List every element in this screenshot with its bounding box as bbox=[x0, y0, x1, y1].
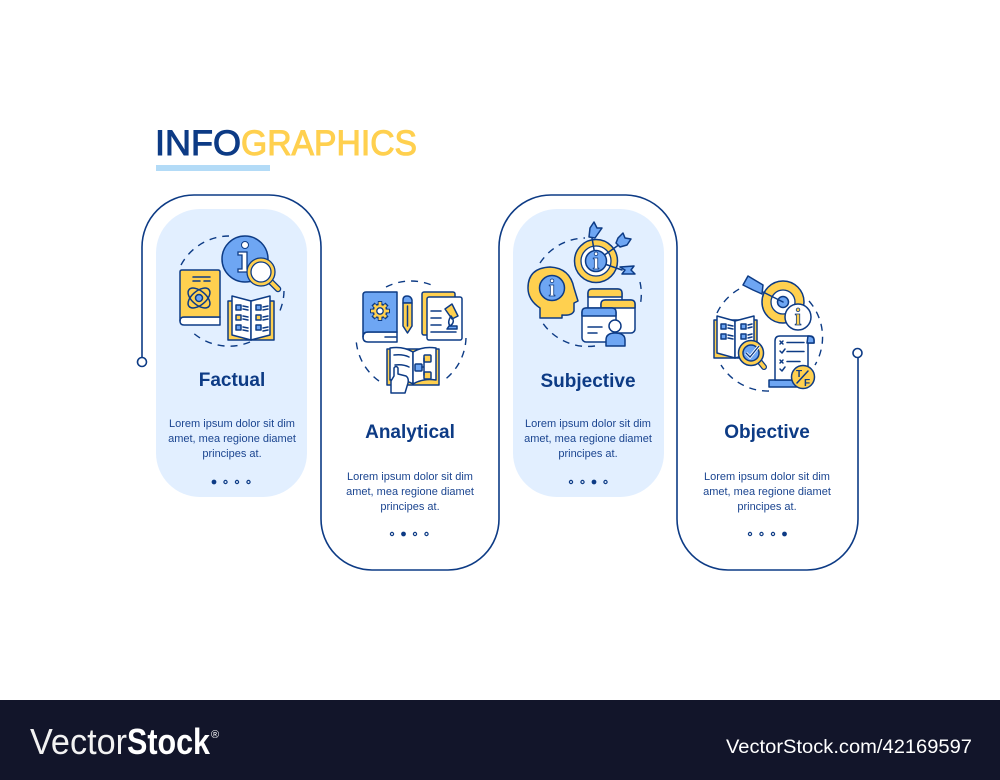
panel background: Subjective bbox=[513, 209, 664, 497]
heading: Analytical: Analytical bbox=[365, 422, 455, 443]
heading: Factual: Factual bbox=[199, 370, 265, 391]
heading: Objective: Objective bbox=[724, 422, 810, 443]
icon: head, target and browser windows: i bbox=[549, 276, 556, 302]
footer logo: VectorStock bbox=[30, 721, 219, 762]
text block: Objective description bbox=[703, 471, 831, 513]
footer logo: VectorStock: Stock bbox=[127, 721, 211, 762]
pagination dots: second active bbox=[390, 532, 428, 536]
text block: Objective description: principes at. bbox=[737, 501, 797, 513]
icon: target, checklist and true/false bbox=[714, 276, 823, 391]
pagination dots: fourth active bbox=[748, 532, 786, 536]
footer logo: VectorStock: Vector bbox=[30, 721, 127, 762]
text block: Subjective description: amet, mea regione diamet bbox=[524, 433, 652, 445]
icon: target, checklist and true/false: T bbox=[796, 369, 802, 380]
text block: Subjective description bbox=[524, 418, 652, 460]
text block: Objective description: Lorem ipsum dolor sit dim bbox=[704, 471, 830, 483]
text block: Factual description: principes at. bbox=[202, 448, 262, 460]
panel: Subjective bbox=[524, 222, 652, 484]
text block: Subjective description: principes at. bbox=[558, 448, 618, 460]
text block: Objective description: amet, mea regione diamet bbox=[703, 486, 831, 498]
title underline bbox=[156, 165, 270, 171]
text block: Analytical description: amet, mea regione diamet bbox=[346, 486, 474, 498]
footer logo: VectorStock: ® bbox=[211, 729, 219, 741]
panel: Objective bbox=[703, 276, 831, 536]
icon: books, pencil, document and hand bbox=[356, 281, 466, 393]
pagination dots: third active bbox=[569, 480, 607, 484]
icon: head, target and browser windows bbox=[528, 222, 641, 346]
text block: Factual description: amet, mea regione diamet bbox=[168, 433, 296, 445]
footer image id: VectorStock.com/42169597 bbox=[726, 737, 972, 758]
panel: Factual bbox=[168, 236, 296, 484]
heading: Subjective: Subjective bbox=[540, 371, 636, 392]
title: INFOGRAPHICS: GRAPHICS bbox=[241, 124, 417, 163]
pagination dots: first active bbox=[212, 480, 250, 484]
icon: head, target and browser windows: i bbox=[593, 249, 600, 275]
panel: Analytical bbox=[346, 281, 474, 536]
text block: Subjective description: Lorem ipsum dolor sit dim bbox=[525, 418, 651, 430]
icon: book, info and magnifier bbox=[180, 236, 284, 346]
text block: Analytical description: principes at. bbox=[380, 501, 440, 513]
panel background: Factual bbox=[156, 209, 307, 497]
text block: Analytical description bbox=[346, 471, 474, 513]
icon: target, checklist and true/false: F bbox=[804, 378, 810, 389]
text block: Factual description: Lorem ipsum dolor sit dim bbox=[169, 418, 295, 430]
title: INFOGRAPHICS: INFO bbox=[155, 124, 241, 163]
text block: Factual description bbox=[168, 418, 296, 460]
icon: target, checklist and true/false: i bbox=[795, 305, 802, 331]
footer band bbox=[0, 700, 1000, 780]
title: INFOGRAPHICS bbox=[155, 124, 417, 163]
connecting outline around the four panels bbox=[138, 195, 862, 570]
text block: Analytical description: Lorem ipsum dolor sit dim bbox=[347, 471, 473, 483]
